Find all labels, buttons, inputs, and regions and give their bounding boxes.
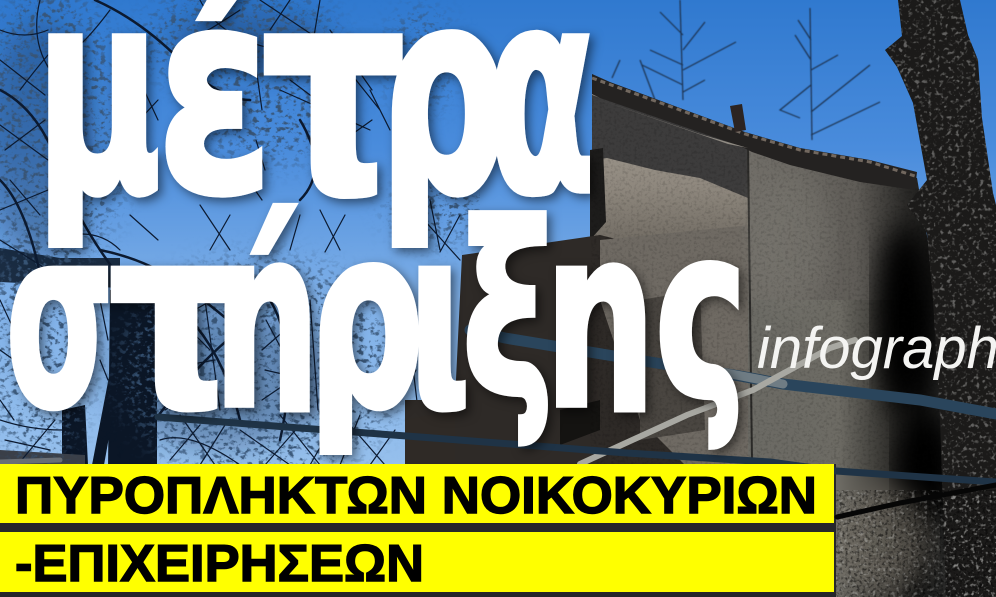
yellow banner line 1 [0,464,834,525]
title line 2: στήριξης: ξ [462,175,554,451]
building: right wall [748,148,945,470]
title line 2: στήριξης: ι [408,175,470,464]
title line 2: στήριξης: ρ [308,176,424,464]
title line 2: στήριξης: τ [109,176,244,464]
roof [592,74,917,190]
title: μέτρα στήριξης [6,0,747,464]
pipes [0,330,996,517]
title line 2: στήριξης: η [545,174,655,463]
title line 2: στήριξης [6,174,747,464]
banner text: ΠΥΡΟΠΛΗΚΤΩΝ ΝΟΙΚΟΚΥΡΙΩΝ: ΠΥΡΟΠΛΗΚΤΩΝ ΝΟΙΚΟΚΥΡΙΩΝ [15,467,817,525]
burnt pines beyond the roof [612,0,880,140]
title line 2: στήριξης: ή [214,175,319,464]
dark patches on wall [875,225,935,415]
building: left wall [592,92,750,300]
title line 2: στήριξης: ς [655,175,747,454]
ground rubble texture [830,485,996,597]
building: lower dark facade [405,235,750,470]
tree trunks on the left [0,248,157,470]
wall grain [592,94,882,469]
title line 1: μέτρα [36,0,594,257]
title line 2: στήριξης: σ [6,176,113,464]
balcony window [560,400,600,445]
branches [0,0,460,465]
window recess on left wall [590,148,606,240]
charred tree [880,0,996,597]
banner text: -ΕΠΙΧΕΙΡΗΣΕΩΝ: -ΕΠΙΧΕΙΡΗΣΕΩΝ [15,535,424,593]
yellow banner line 2 [0,532,834,593]
wall shadow under the eaves [592,95,748,198]
soft shading behind branches [0,10,330,450]
lower band backing [0,464,836,597]
twig texture [0,0,480,470]
